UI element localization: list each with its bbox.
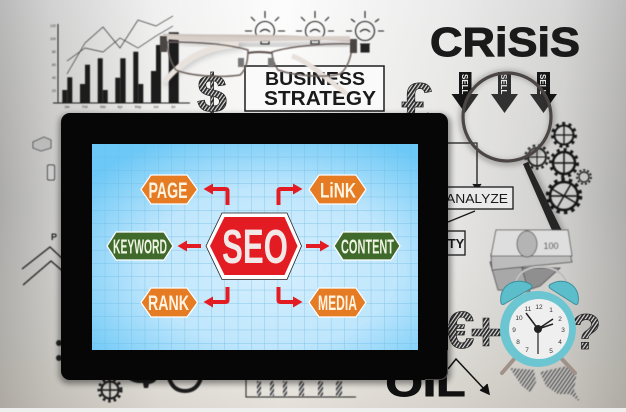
flowchart: analyze — [440, 143, 513, 255]
bar and line chart: 120 — [50, 24, 56, 28]
bar and line chart: Jan — [64, 105, 70, 109]
business strategy box — [245, 66, 384, 111]
bar and line chart: 100 — [50, 37, 56, 41]
rank label: RANK — [148, 292, 189, 315]
page label — [141, 175, 198, 204]
flowchart: analyze: ANALYZE — [446, 191, 508, 206]
icon: phone — [48, 165, 54, 180]
icon: alarm clock — [500, 267, 578, 373]
link label: LiNK — [320, 180, 356, 202]
sell arrows: SELL — [460, 74, 469, 95]
icon: dollar sign: $ — [197, 64, 227, 124]
icon: gears — [526, 124, 591, 212]
left sketches: P — [51, 232, 57, 242]
content label: CONTENT — [341, 236, 394, 258]
screen — [92, 144, 418, 350]
icon: glasses — [160, 35, 357, 94]
flowchart: analyze: TY — [448, 236, 465, 251]
icon: euro plus question — [446, 302, 601, 360]
icon: dollar bills: 100 — [543, 241, 559, 251]
icon: euro plus question: € — [446, 302, 474, 360]
sell arrows: SELL — [538, 74, 547, 95]
left sketches — [22, 137, 66, 361]
sell arrows: SELL — [499, 74, 508, 95]
icon: alarm clock: 3 — [561, 327, 565, 334]
bar and line chart: 60 — [52, 63, 56, 67]
bar and line chart: May — [135, 105, 142, 109]
keyword label: KEYWORD — [113, 236, 167, 258]
bar and line chart: Apr — [117, 105, 124, 109]
chevron marks — [22, 247, 66, 285]
arrows — [178, 184, 330, 308]
icon: alarm clock: 8 — [516, 339, 520, 346]
bar and line chart: 20 — [52, 89, 56, 93]
icon: printer — [33, 137, 51, 151]
seo hexagon — [206, 213, 302, 280]
icon: alarm clock: 4 — [558, 339, 562, 346]
icon: alarm clock: 9 — [512, 327, 516, 334]
bar and line chart — [50, 16, 190, 109]
icon: alarm clock: 12 — [535, 304, 543, 311]
media label: MEDIA — [318, 292, 357, 315]
bar and line chart: Jun — [153, 105, 159, 109]
bar and line chart: 80 — [52, 50, 56, 54]
icon: alarm clock: 10 — [515, 315, 523, 322]
icon: alarm clock: 1 — [549, 307, 553, 314]
icon: alarm clock: 11 — [525, 306, 532, 313]
tablet — [59, 113, 451, 384]
icon: alarm clock: 2 — [558, 316, 562, 323]
bar and line chart: Feb — [82, 105, 88, 109]
icon: pound sign: £ — [401, 71, 435, 138]
rank label — [141, 288, 198, 317]
sell arrows — [452, 72, 557, 113]
content label — [334, 232, 400, 260]
seo hexagon: SEO — [222, 221, 288, 274]
icon: world map sketch — [510, 366, 580, 402]
icon: dollar bills — [490, 230, 572, 292]
bottom gears and chart — [99, 378, 356, 401]
icon: light bulbs — [245, 11, 384, 52]
bar and line chart: Mar — [100, 105, 107, 109]
business strategy box: STRATEGY — [264, 88, 377, 110]
icon: alarm clock: 5 — [549, 348, 553, 355]
link label — [309, 175, 366, 204]
keyword label — [107, 232, 173, 260]
media label — [309, 288, 366, 317]
page label: PAGE — [148, 178, 188, 203]
crisis heading: CRiSiS — [430, 19, 580, 65]
icon: magnifying glass — [462, 73, 566, 238]
business strategy box: BUSINESS — [265, 69, 365, 89]
oil heading: OIL — [386, 363, 466, 405]
bar and line chart: Jul — [171, 105, 175, 109]
icon: euro plus question: ? — [571, 304, 601, 360]
icon: alarm clock: 7 — [525, 347, 529, 354]
bar and line chart: 40 — [52, 76, 56, 80]
oil falling arrow — [448, 359, 489, 394]
